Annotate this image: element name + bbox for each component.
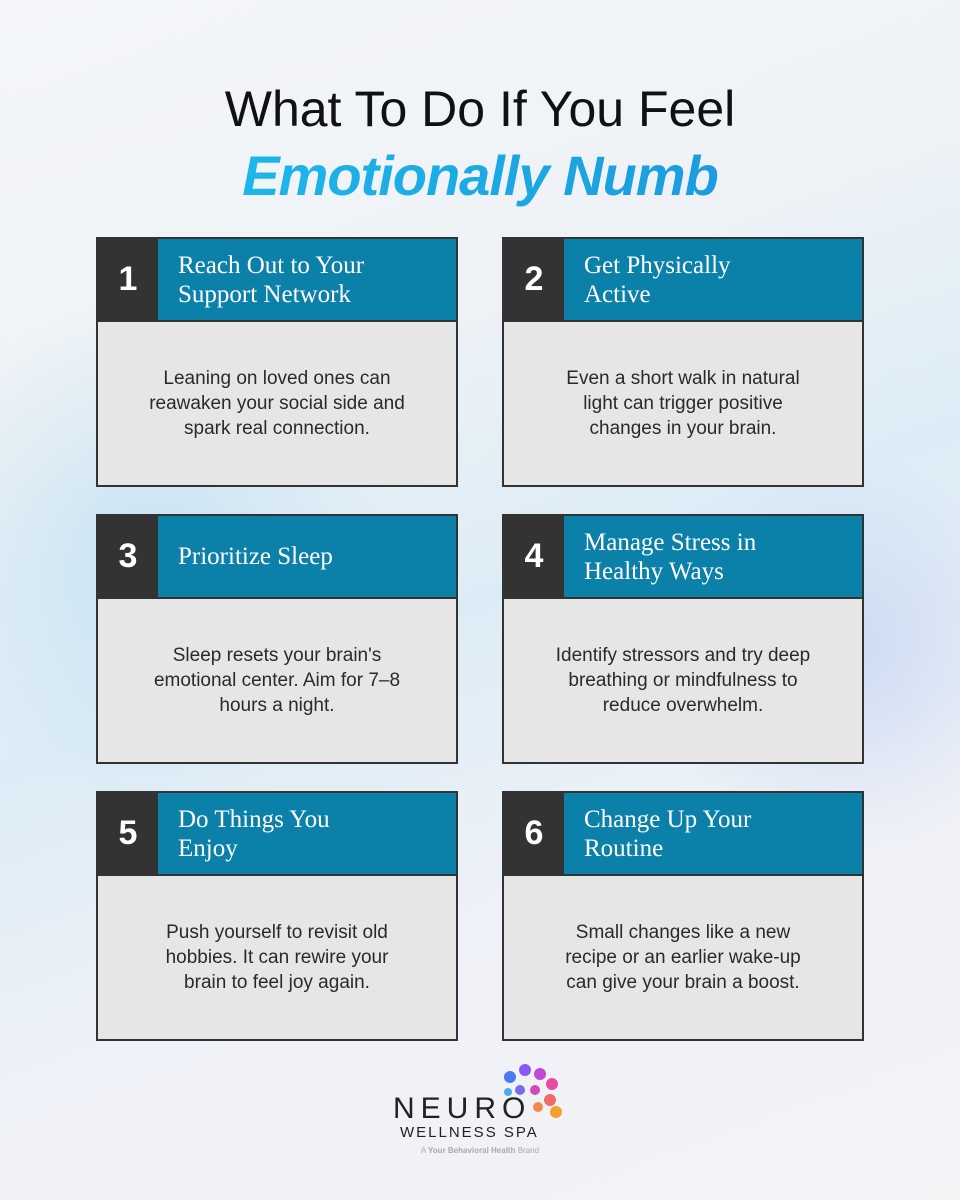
panel: 5: Push yourself to revisit old hobbies. It can rewire your brain to feel joy again. [166,922,388,993]
panel: 2: Get Physically [584,252,731,278]
panel: 5: 5 [119,814,137,852]
panel: 4 [502,514,864,764]
panel: 4: Identify stressors and try deep breathing or mindfulness to reduce overwhelm. [556,645,810,716]
panel: 6: Change Up Your [584,806,751,832]
panel: 2: Even a short walk in natural light can trigger positive changes in your brain. [566,368,800,439]
panel: 3: 3 [119,537,137,575]
logo: NEURO [393,1092,531,1125]
panel: 5: Do Things You [178,806,330,832]
panel: 6: 6 [525,814,543,852]
subtitle: Emotionally Numb [242,144,718,207]
logo: A Your Behavioral Health Brand [421,1146,539,1155]
panel: 3: Sleep resets your brain's emotional center. Aim for 7–8 hours a night. [154,645,400,716]
panel: 2 [502,237,864,487]
panel: 5 [96,791,458,1041]
panel: 5: Enjoy [178,834,238,862]
panel: 1: 1 [119,260,137,298]
icon: brain dots [504,1064,562,1118]
panel: 4: Healthy Ways [584,558,724,584]
logo [393,1064,562,1155]
panel: 3 [96,514,458,764]
panel: 6: Routine [584,834,663,862]
panel: 2: 2 [525,260,543,298]
panel: 6: Small changes like a new recipe or an earlier wake-up can give your brain a boost. [565,922,801,993]
subtitle [0,143,960,208]
title: What To Do If You Feel [225,81,735,137]
panel: 1 [96,237,458,487]
panel: 1: Support Network [178,280,351,308]
panel: 2: Active [584,280,651,308]
logo: WELLNESS SPA [400,1124,539,1141]
panel: 6 [502,791,864,1041]
panel: 4: Manage Stress in [584,528,756,556]
panel: 1: Leaning on loved ones can reawaken your social side and spark real connection. [149,368,405,439]
panel: 4: 4 [525,537,543,575]
panel: 1: Reach Out to Your [178,252,364,278]
panel: 3: Prioritize Sleep [178,543,333,570]
